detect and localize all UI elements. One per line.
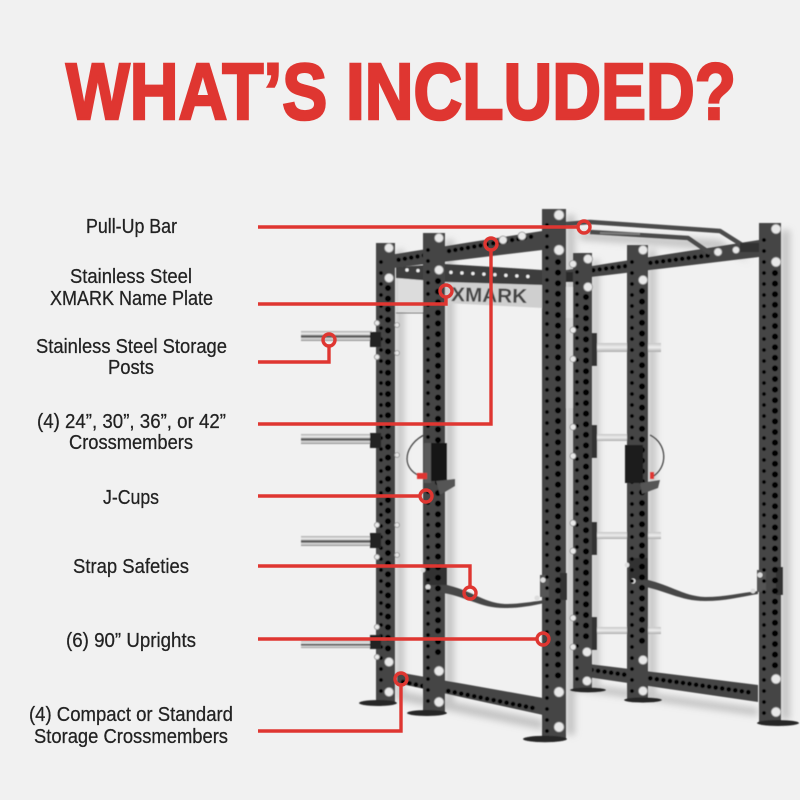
label: name plate: Stainless Steel bbox=[70, 266, 192, 288]
label: name plate bbox=[50, 266, 213, 310]
pull-up bar bbox=[566, 222, 760, 253]
front storage posts bbox=[301, 331, 381, 649]
callout lines bbox=[258, 221, 590, 731]
label: storage crossmembers bbox=[29, 704, 233, 748]
callout: strap safeties bbox=[258, 566, 476, 599]
callout: crossmembers bbox=[258, 238, 497, 424]
label: j-cups: J-Cups bbox=[103, 487, 159, 509]
label: strap safeties: Strap Safeties bbox=[73, 556, 189, 578]
power rack illustration bbox=[301, 209, 799, 742]
label: storage posts: Posts bbox=[108, 357, 154, 379]
label: crossmembers: (4) 24”, 30”, 36”, or 42” bbox=[37, 411, 226, 433]
label: storage crossmembers: Storage Crossmembers bbox=[34, 726, 228, 748]
label: crossmembers bbox=[37, 411, 226, 454]
label: uprights: (6) 90” Uprights bbox=[66, 630, 196, 652]
name plate: XMARK bbox=[451, 284, 528, 308]
crossmembers bbox=[376, 231, 759, 715]
callout: storage posts bbox=[258, 334, 335, 362]
j-cups bbox=[407, 434, 664, 495]
labels bbox=[29, 216, 233, 748]
callout: name plate bbox=[258, 285, 452, 304]
callout: pull-up bar bbox=[258, 221, 590, 233]
label: pull-up bar: Pull-Up Bar bbox=[86, 216, 177, 238]
label: crossmembers: Crossmembers bbox=[69, 432, 193, 454]
feet bbox=[359, 688, 799, 742]
label: name plate: XMARK Name Plate bbox=[50, 288, 213, 310]
name plate bbox=[396, 278, 577, 408]
back storage posts bbox=[591, 333, 661, 650]
upright holes bbox=[381, 225, 775, 735]
label: storage posts bbox=[36, 336, 227, 379]
strap safeties bbox=[421, 558, 783, 608]
callout: uprights bbox=[258, 633, 549, 645]
uprights bbox=[376, 209, 781, 740]
callout: j-cups bbox=[258, 490, 432, 502]
bolts bbox=[374, 210, 781, 732]
callout: storage crossmembers bbox=[258, 673, 407, 731]
label: storage crossmembers: (4) Compact or Standard bbox=[29, 704, 233, 726]
label: storage posts: Stainless Steel Storage bbox=[36, 336, 227, 358]
